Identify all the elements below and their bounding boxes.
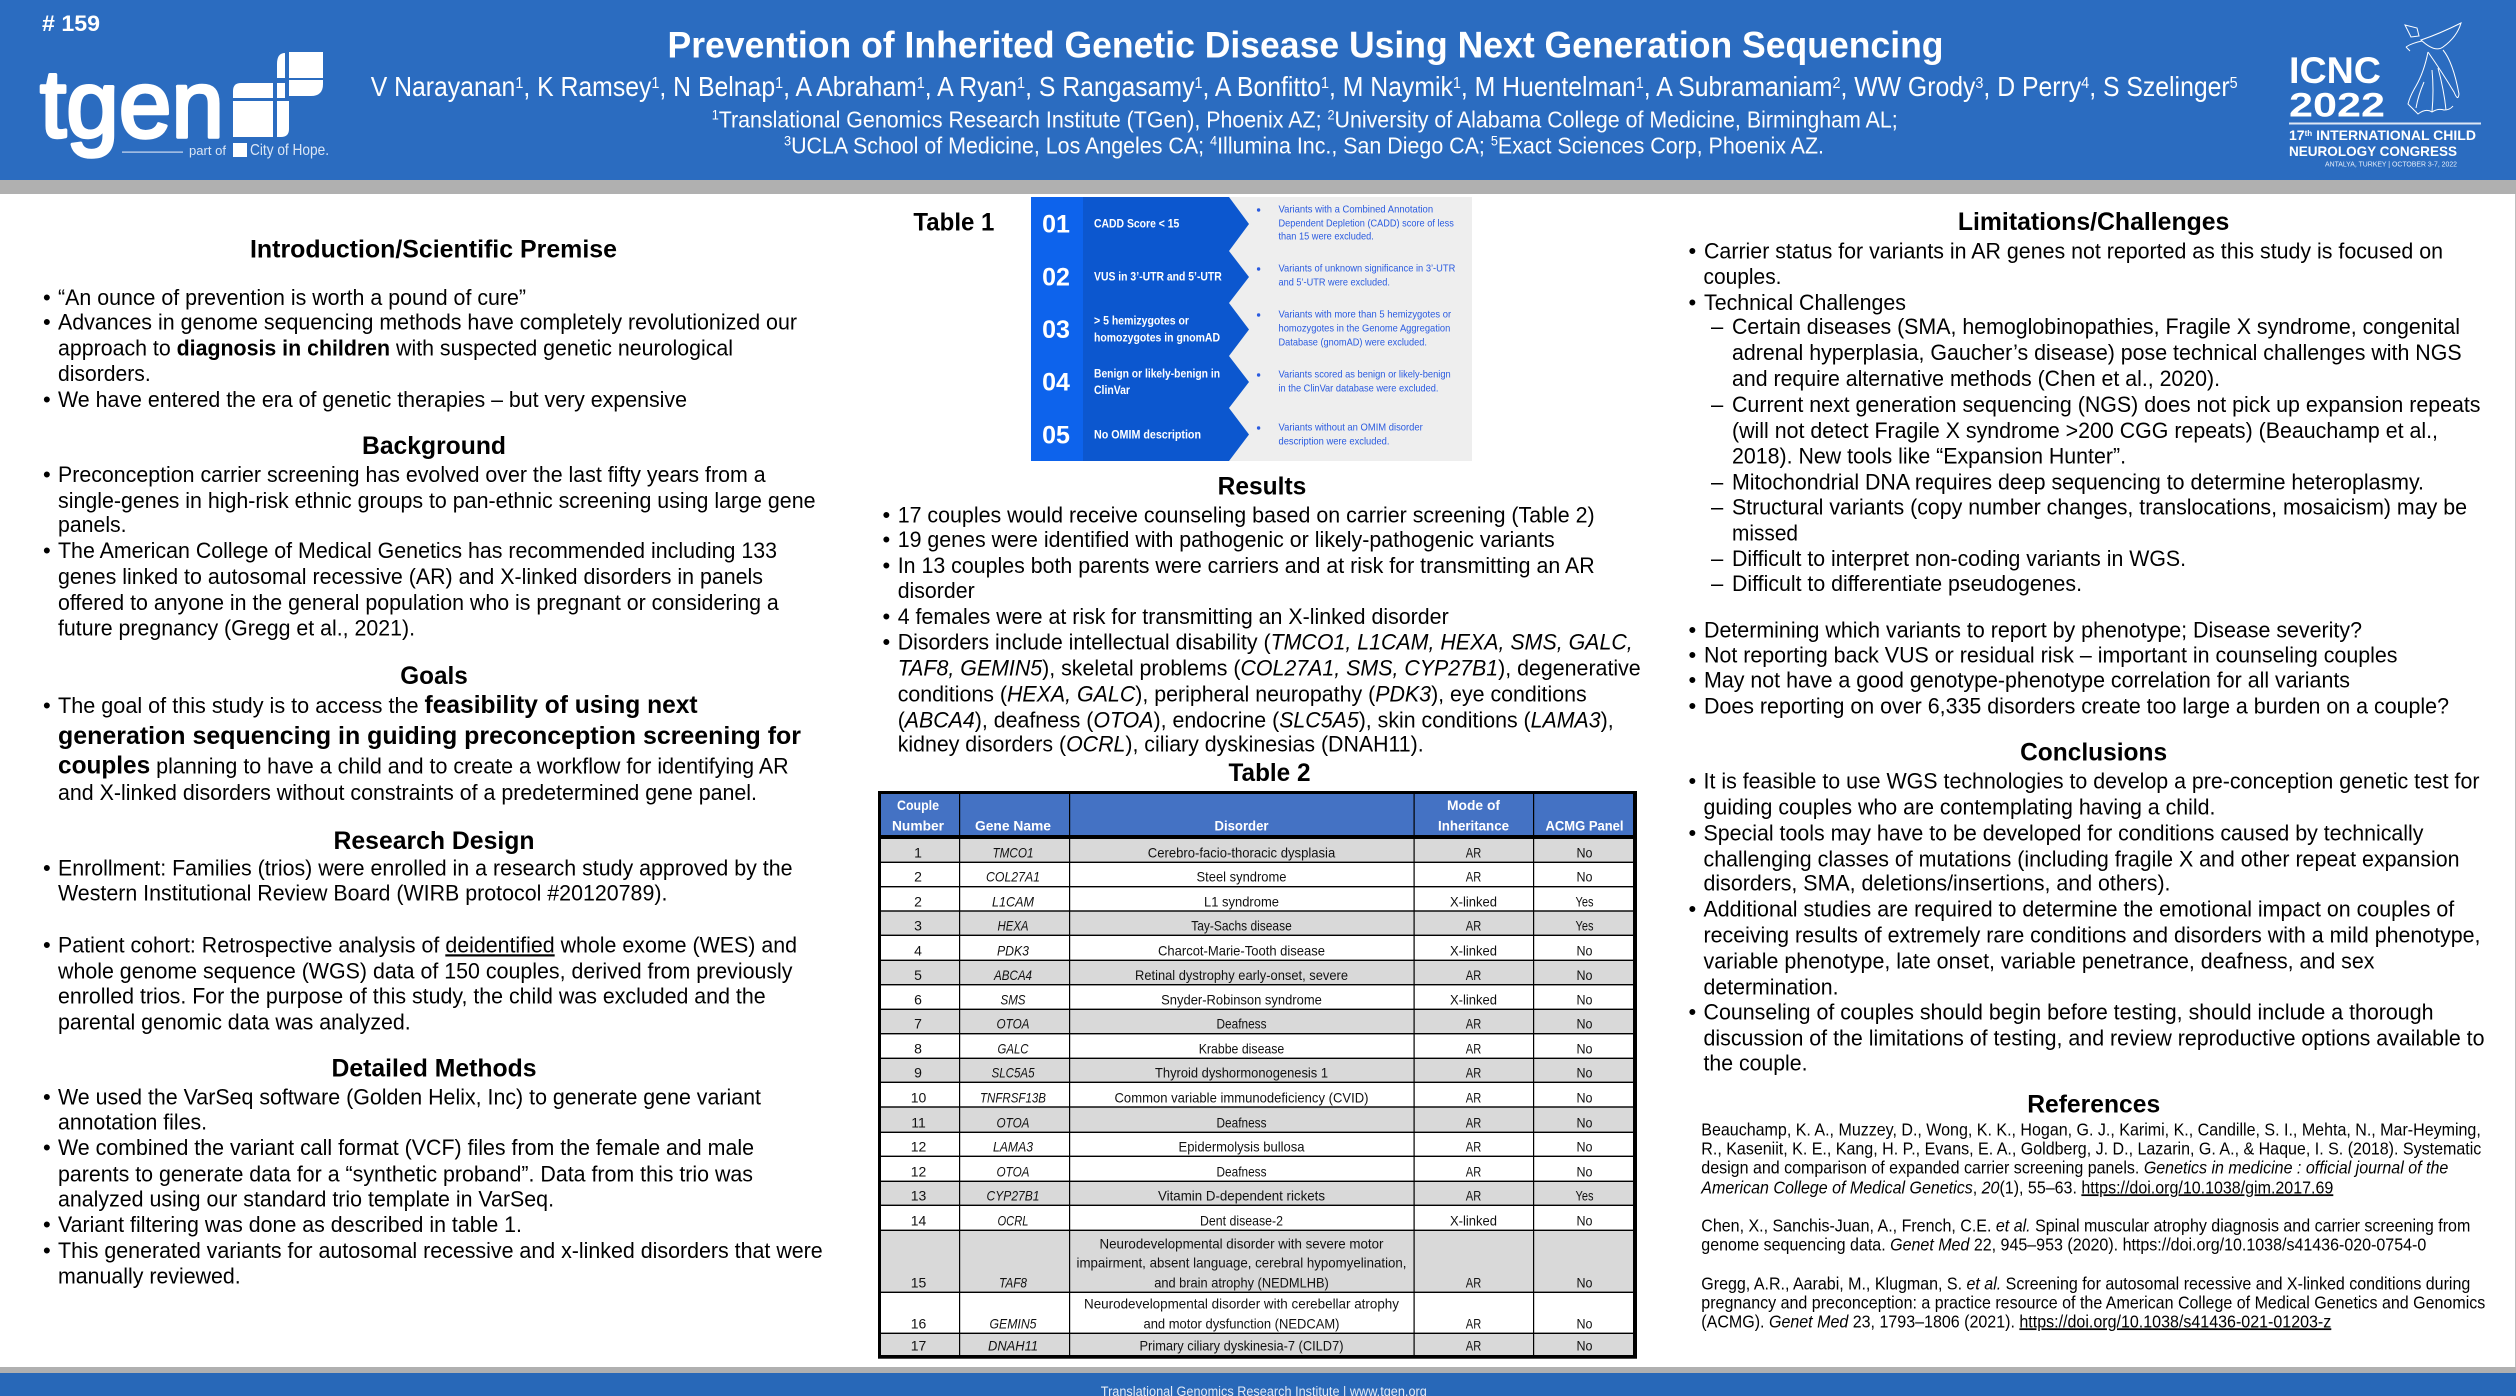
text: conclusions: variable phenotype, late onset, variable penetrance, deafness, and sex (1704, 949, 2374, 974)
table rows: COL27A1 (986, 869, 1040, 885)
table rows: No (1576, 845, 1593, 861)
table rows: Neurodevelopmental disorder with cerebellar atrophy (1084, 1296, 1399, 1312)
table rows: SLC5A5 (992, 1065, 1035, 1081)
affiliations: 3UCLA School of Medicine, Los Angeles CA; 4Illumina Inc., San Diego CA; 5Exact Sciences Corp, Phoenix AZ. (784, 133, 1824, 159)
text: references: Gregg, A.R., Aarabi, M., Klugman, S. et al. Screening for autosomal recessive and X-linked conditions during (1701, 1273, 2470, 1293)
step labels: VUS in 3’-UTR and 5’-UTR (1094, 271, 1222, 283)
table rows: AR (1466, 1065, 1481, 1081)
step labels: ClinVar (1094, 385, 1130, 397)
text: goals: • (43, 693, 51, 718)
text: conclusions: disorders, SMA, deletions/insertions, and others). (1704, 871, 2170, 896)
table rows: No (1576, 992, 1593, 1008)
table rows: Dent disease-2 (1200, 1213, 1283, 1229)
text: conclusions: the couple. (1704, 1051, 1808, 1076)
table rows: Snyder-Robinson syndrome (1161, 992, 1322, 1008)
table rows: 10 (911, 1090, 926, 1106)
table rows: AR (1466, 1041, 1481, 1057)
text: background: The American College of Medical Genetics has recommended including 133 (58, 538, 777, 563)
table rows: L1 syndrome (1204, 894, 1279, 910)
heading: introduction: Introduction/Scientific Premise (250, 236, 617, 264)
table rows: SMS (1000, 992, 1026, 1008)
table rows: OTOA (996, 1164, 1030, 1180)
text: results: • (882, 527, 890, 552)
table rows: OTOA (996, 1016, 1030, 1032)
text: conclusions: Special tools may have to be developed for conditions caused by technically (1704, 821, 2424, 846)
text: goals: and X-linked disorders without constraints of a predetermined gene panel. (58, 780, 757, 805)
table rows: Retinal dystrophy early-onset, severe (1135, 967, 1348, 983)
text: results: • (882, 502, 890, 527)
heading: background: Background (362, 432, 506, 460)
heading: conclusions: Conclusions (2020, 738, 2167, 766)
step descriptions: Variants without an OMIM disorder (1278, 422, 1423, 434)
text: introduction: • (43, 387, 51, 412)
table rows: No (1576, 1338, 1593, 1354)
table rows: X-linked (1450, 894, 1497, 910)
text: limitations: Certain diseases (SMA, hemoglobinopathies, Fragile X syndrome, congenital (1732, 314, 2460, 339)
text: background (43, 462, 816, 641)
text: detailed methods: This generated variants for autosomal recessive and x-linked disorders that were (58, 1238, 823, 1263)
text: results: kidney disorders (OCRL), ciliary dyskinesias (DNAH11). (898, 732, 1424, 757)
table rows: AR (1466, 1164, 1481, 1180)
text: limitations: Determining which variants to report by phenotype; Disease severity? (1704, 617, 2362, 642)
table rows: 12 (911, 1164, 926, 1180)
text: background: Preconception carrier screening has evolved over the last fifty years from a (58, 462, 766, 487)
text: research design: • (43, 856, 51, 881)
heading: detailed methods: Detailed Methods (332, 1055, 536, 1083)
text: results: TAF8, GEMIN5), skeletal problems (COL27A1, SMS, CYP27B1), degenerative (898, 656, 1641, 681)
text: introduction: disorders. (58, 361, 151, 386)
table rows: OCRL (998, 1213, 1028, 1229)
table rows: Tay-Sachs disease (1191, 918, 1292, 934)
text: conclusions: determination. (1704, 974, 1838, 999)
text: limitations: Not reporting back VUS or residual risk – important in counseling couples (1704, 643, 2398, 668)
text: references (1700, 1120, 2485, 1331)
table rows: No (1576, 869, 1593, 885)
logo: ICNC 2022: 2022 (2289, 87, 2385, 125)
text: results: • (882, 553, 890, 578)
text: goals: couples planning to have a child and to create a workflow for identifying AR (58, 752, 789, 780)
table rows: Yes (1576, 894, 1594, 910)
text: detailed methods: • (43, 1212, 51, 1237)
table rows: Steel syndrome (1196, 869, 1287, 885)
text: results: disorder (898, 578, 975, 603)
text: limitations: • (1688, 290, 1696, 315)
text: detailed methods: We combined the variant call format (VCF) files from the female and male (58, 1135, 754, 1160)
table rows: and motor dysfunction (NEDCAM) (1144, 1316, 1340, 1332)
text: limitations: (will not detect Fragile X syndrome >200 CGG repeats) (Beauchamp et al., (1732, 418, 2438, 443)
poster number: # 159 (42, 11, 100, 36)
table rows: 12 (911, 1139, 926, 1155)
table rows: 6 (914, 992, 922, 1008)
table rows: TMCO1 (992, 845, 1034, 861)
text: limitations: Difficult to interpret non-coding variants in WGS. (1732, 546, 2186, 571)
text: introduction: “An ounce of prevention is worth a pound of cure” (58, 285, 526, 310)
text: introduction: • (43, 285, 51, 310)
heading: research design: Research Design (334, 827, 534, 855)
text: research design: Enrollment: Families (trios) were enrolled in a research study approved by the (58, 856, 792, 881)
table rows: No (1576, 1065, 1593, 1081)
table rows: Thyroid dyshormonogenesis 1 (1155, 1065, 1328, 1081)
text: limitations: 2018). New tools like “Expansion Hunter”. (1732, 443, 2126, 468)
text: research design: whole genome sequence (WGS) data of 150 couples, derived from previously (57, 958, 793, 983)
table rows: AR (1466, 967, 1481, 983)
step numbers (1042, 210, 1070, 449)
table rows: 9 (914, 1065, 922, 1081)
table rows: impairment, absent language, cerebral hypomyelination, (1076, 1255, 1406, 1271)
text: detailed methods: • (43, 1238, 51, 1263)
table rows: No (1576, 1041, 1593, 1057)
text: introduction (43, 285, 797, 412)
text: results: • (882, 630, 890, 655)
table rows: 1 (914, 845, 922, 861)
step descriptions: Variants scored as benign or likely-benign (1278, 369, 1451, 381)
text: conclusions (1688, 769, 2484, 1076)
text: background: • (43, 538, 51, 563)
table rows: AR (1466, 1115, 1481, 1131)
text: background: single-genes in high-risk ethnic groups to pan-ethnic screening using large gene (58, 488, 816, 513)
table rows: No (1576, 1275, 1593, 1291)
text: limitations: • (1688, 643, 1696, 668)
table rows: AR (1466, 1316, 1481, 1332)
step descriptions: Variants with more than 5 hemizygotes or (1278, 309, 1452, 321)
table rows: AR (1466, 918, 1481, 934)
step descriptions: Variants with a Combined Annotation (1278, 204, 1433, 216)
text: limitations: • (1688, 238, 1696, 263)
step numbers: 04 (1042, 368, 1070, 396)
text: references: Chen, X., Sanchis-Juan, A., French, C.E. et al. Spinal muscular atrophy diagnosis and carrier screening from (1701, 1216, 2470, 1236)
step labels: CADD Score < 15 (1094, 218, 1180, 230)
step descriptions: in the ClinVar database were excluded. (1278, 383, 1438, 395)
text: results: (ABCA4), deafness (OTOA), endocrine (SLC5A5), skin conditions (LAMA3), (898, 707, 1614, 732)
text: limitations: adrenal hyperplasia, Gaucher’s disease) pose technical challenges with NGS (1732, 340, 2462, 365)
step numbers: 01 (1042, 210, 1070, 238)
text: goals (43, 691, 801, 805)
text: detailed methods: analyzed using our standard trio template in VarSeq. (58, 1187, 554, 1212)
text: limitations: – (1711, 314, 1724, 339)
table rows (911, 845, 1594, 1354)
table rows: AR (1466, 1139, 1481, 1155)
table rows: Deafness (1216, 1164, 1266, 1180)
text: results: Disorders include intellectual disability (TMCO1, L1CAM, HEXA, SMS, GALC, (898, 630, 1633, 655)
table rows: No (1576, 967, 1593, 983)
logo: tgen: City of Hope. (250, 142, 329, 159)
table rows: X-linked (1450, 992, 1497, 1008)
text: results: 17 couples would receive counseling based on carrier screening (Table 2) (898, 502, 1595, 527)
table rows: No (1576, 1213, 1593, 1229)
text: limitations: • (1688, 668, 1696, 693)
table rows: 5 (914, 967, 922, 983)
table rows: No (1576, 1164, 1593, 1180)
center column (878, 197, 1641, 1359)
text: limitations: Technical Challenges (1704, 290, 1906, 315)
table rows: 14 (911, 1213, 926, 1229)
text: conclusions: discussion of the limitations of testing, and review reproductive options available to (1704, 1026, 2484, 1051)
table header: Couple (897, 798, 939, 813)
table rows: No (1576, 1016, 1593, 1032)
text: conclusions: Additional studies are required to determine the emotional impact on couples of (1704, 897, 2455, 922)
text: limitations: missed (1732, 520, 1798, 545)
table rows: Deafness (1216, 1016, 1266, 1032)
text: references: (ACMG). Genet Med 23, 1793–1806 (2021). https://doi.org/10.1038/s41436-021-01203-z (1701, 1311, 2331, 1331)
text: goals: The goal of this study is to access the feasibility of using next (58, 691, 698, 719)
text: references: design and comparison of expanded carrier screening panels. Genetics in medicine : official journal of the (1701, 1158, 2448, 1178)
text: limitations: Structural variants (copy number changes, translocations, mosaicism) may be (1732, 494, 2467, 519)
table rows: 4 (914, 943, 922, 959)
text: introduction: We have entered the era of genetic therapies – but very expensive (58, 387, 687, 412)
text: limitations: Carrier status for variants in AR genes not reported as this study is focused on (1704, 238, 2443, 263)
header band (0, 0, 2516, 194)
logo: tgen: part of (189, 143, 226, 158)
text: limitations: Mitochondrial DNA requires deep sequencing to determine heteroplasmy. (1732, 469, 2424, 494)
text: limitations (1688, 238, 2480, 719)
icon: whirling dancer (2405, 23, 2461, 114)
table header (892, 798, 1624, 834)
authors: V Narayanan1, K Ramsey1, N Belnap1, A Abraham1, A Ryan1, S Rangasamy1, A Bonfitto1, M Naymik1, M Huentelman1, A Subramaniam2, WW Grody3, D Perry4, S Szelinger5 (371, 71, 2238, 102)
table rows: AR (1466, 869, 1481, 885)
table header: Disorder (1214, 819, 1269, 834)
affiliations: 1Translational Genomics Research Institute (TGen), Phoenix AZ; 2University of Alabama College of Medicine, Birmingham AL; (712, 107, 1898, 133)
text: limitations: and require alternative methods (Chen et al., 2020). (1732, 366, 2220, 391)
text: conclusions: challenging classes of mutations (including fragile X and other repeat expansion (1704, 847, 2460, 872)
step labels: homozygotes in gnomAD (1094, 332, 1220, 344)
table rows: No (1576, 1139, 1593, 1155)
step descriptions: Variants of unknown significance in 3’-UTR (1278, 263, 1456, 275)
text: limitations: • (1688, 694, 1696, 719)
text: introduction: Advances in genome sequencing methods have completely revolutionized our (58, 309, 797, 334)
text: conclusions: receiving results of extremely rare conditions and disorders with a mild phenotype, (1704, 923, 2480, 948)
table rows: DNAH11 (988, 1338, 1038, 1354)
text: conclusions: • (1688, 897, 1696, 922)
table header: Gene Name (975, 819, 1051, 834)
text: detailed methods: • (43, 1084, 51, 1109)
step numbers: 02 (1042, 263, 1070, 291)
text: background: panels. (58, 512, 127, 537)
text: limitations: couples. (1704, 264, 1782, 289)
text: limitations: – (1711, 546, 1724, 571)
table rows: PDK3 (997, 943, 1029, 959)
text: background: future pregnancy (Gregg et al., 2021). (58, 616, 415, 641)
table rows: AR (1466, 1016, 1481, 1032)
table rows: 17 (911, 1338, 926, 1354)
table rows: 15 (911, 1275, 926, 1291)
table rows: AR (1466, 1090, 1481, 1106)
text: detailed methods: manually reviewed. (58, 1264, 241, 1289)
text: limitations: Difficult to differentiate pseudogenes. (1732, 571, 2082, 596)
table header: ACMG Panel (1546, 819, 1624, 834)
text: introduction: approach to diagnosis in children with suspected genetic neurological (58, 335, 733, 360)
text: detailed methods: Variant filtering was done as described in table 1. (58, 1212, 522, 1237)
logo: ICNC 2022: NEUROLOGY CONGRESS (2289, 143, 2457, 159)
table rows: 16 (911, 1316, 926, 1332)
table rows: ABCA4 (993, 967, 1032, 983)
table rows: AR (1466, 1338, 1481, 1354)
text: limitations: Does reporting on over 6,335 disorders create too large a burden on a couple? (1704, 694, 2449, 719)
table rows: Krabbe disease (1199, 1041, 1284, 1057)
text: conclusions: • (1688, 769, 1696, 794)
text: results: In 13 couples both parents were carriers and at risk for transmitting an AR (898, 553, 1595, 578)
table rows: AR (1466, 1188, 1481, 1204)
table rows: 8 (914, 1041, 922, 1057)
text: research design: • (43, 932, 51, 957)
table rows: X-linked (1450, 1213, 1497, 1229)
step labels: > 5 hemizygotes or (1094, 315, 1189, 327)
panel: table 1 filter steps (1031, 197, 1472, 461)
table rows: No (1576, 1090, 1593, 1106)
text: background: genes linked to autosomal recessive (AR) and X-linked disorders in panels (58, 564, 763, 589)
text: background: offered to anyone in the general population who is pregnant or considering a (58, 590, 780, 615)
table rows: No (1576, 943, 1593, 959)
step numbers: 03 (1042, 316, 1070, 344)
text: research design: parental genomic data was analyzed. (58, 1009, 411, 1034)
table rows: 2 (914, 869, 922, 885)
table header: Inheritance (1438, 819, 1509, 834)
text: limitations: – (1711, 469, 1724, 494)
heading: table 1: Table 1 (913, 209, 994, 237)
table rows: 3 (914, 918, 922, 934)
step descriptions: homozygotes in the Genome Aggregation (1278, 323, 1450, 335)
left column (43, 236, 823, 1289)
table rows: 7 (914, 1016, 922, 1032)
text: results (882, 502, 1641, 757)
text: limitations: Current next generation sequencing (NGS) does not pick up expansion repeats (1732, 392, 2480, 417)
text: research design: Patient cohort: Retrospective analysis of deidentified whole exome (WES) and (58, 932, 797, 957)
heading: references: References (2027, 1090, 2160, 1118)
heading: results: Results (1218, 472, 1306, 500)
table rows: Common variable immunodeficiency (CVID) (1114, 1090, 1368, 1106)
table rows: CYP27B1 (986, 1188, 1040, 1204)
table rows: GEMIN5 (990, 1316, 1037, 1332)
text: results: • (882, 604, 890, 629)
text: references: genome sequencing data. Genet Med 22, 945–953 (2020). https://doi.org/10.1038/s41436-020-0754-0 (1701, 1235, 2426, 1255)
table rows: X-linked (1450, 943, 1497, 959)
text: references: American College of Medical Genetics, 20(1), 55–63. https://doi.org/10.1038/gim.2017.69 (1700, 1177, 2333, 1197)
step numbers: 05 (1042, 421, 1070, 449)
table header: Number (892, 819, 945, 834)
text: conclusions: It is feasible to use WGS technologies to develop a pre-conception genetic test for (1704, 769, 2480, 794)
heading: limitations: Limitations/Challenges (1958, 208, 2229, 236)
heading: goals: Goals (400, 662, 468, 690)
table rows: Primary ciliary dyskinesia-7 (CILD7) (1140, 1338, 1344, 1354)
step descriptions: Database (gnomAD) were excluded. (1278, 337, 1427, 349)
text: goals: generation sequencing in guiding preconception screening for (58, 722, 801, 750)
affiliations (712, 107, 1898, 159)
step labels: Benign or likely-benign in (1094, 368, 1220, 380)
table rows: Epidermolysis bullosa (1178, 1139, 1305, 1155)
table rows: GALC (998, 1041, 1029, 1057)
text: research design: Western Institutional Review Board (WIRB protocol #20120789). (58, 880, 667, 905)
table rows: Cerebro-facio-thoracic dysplasia (1148, 845, 1335, 861)
table rows: and brain atrophy (NEDMLHB) (1154, 1275, 1329, 1291)
text: detailed methods (43, 1084, 823, 1289)
text: introduction: • (43, 309, 51, 334)
logo: ICNC 2022: ANTALYA, TURKEY | OCTOBER 3-7, 2022 (2325, 160, 2457, 169)
table rows: LAMA3 (993, 1139, 1033, 1155)
logo: ICNC 2022 (2289, 23, 2481, 169)
table rows: Vitamin D-dependent rickets (1158, 1188, 1325, 1204)
table rows: OTOA (996, 1115, 1030, 1131)
table rows: Charcot-Marie-Tooth disease (1158, 943, 1325, 959)
footer band (0, 1367, 2516, 1396)
text: detailed methods: We used the VarSeq software (Golden Helix, Inc) to generate gene variant (58, 1084, 761, 1109)
table rows: Neurodevelopmental disorder with severe motor (1100, 1236, 1384, 1252)
table header: Mode of (1447, 798, 1501, 813)
table rows: HEXA (998, 918, 1028, 934)
step labels: No OMIM description (1094, 430, 1201, 442)
text: limitations: – (1711, 571, 1724, 596)
table rows: Deafness (1216, 1115, 1266, 1131)
text: conclusions: guiding couples who are contemplating having a child. (1704, 795, 2216, 820)
logo: ICNC 2022: ICNC (2289, 50, 2381, 91)
text: conclusions: • (1688, 1000, 1696, 1025)
table rows: TNFRSF13B (980, 1090, 1046, 1106)
text: background: • (43, 462, 51, 487)
text: limitations: – (1711, 494, 1724, 519)
heading: table 2: Table 2 (1228, 759, 1310, 787)
table rows: No (1576, 1115, 1593, 1131)
text: limitations: – (1711, 392, 1724, 417)
right column (1688, 208, 2485, 1331)
text: detailed methods: annotation files. (58, 1109, 207, 1134)
table rows: Yes (1576, 918, 1594, 934)
logo: tgen: tgen (40, 51, 224, 158)
table rows: 2 (914, 894, 922, 910)
text: results: 19 genes were identified with pathogenic or likely-pathogenic variants (898, 527, 1555, 552)
table rows: AR (1466, 1275, 1481, 1291)
step descriptions: than 15 were excluded. (1278, 231, 1374, 243)
step descriptions: and 5’-UTR were excluded. (1278, 277, 1390, 289)
table rows: TAF8 (999, 1275, 1027, 1291)
text: detailed methods: parents to generate data for a “synthetic proband”. Data from this trio was (58, 1161, 753, 1186)
table 2 (878, 791, 1637, 1359)
step descriptions: Dependent Depletion (CADD) score of less (1278, 218, 1454, 230)
table rows: 11 (911, 1115, 926, 1131)
title: Prevention of Inherited Genetic Disease Using Next Generation Sequencing (668, 23, 1944, 65)
table rows: No (1576, 1316, 1593, 1332)
logo: ICNC 2022: 17th INTERNATIONAL CHILD (2289, 127, 2476, 143)
text: results: 4 females were at risk for transmitting an X-linked disorder (898, 604, 1449, 629)
text: detailed methods: • (43, 1135, 51, 1160)
text: conclusions: Counseling of couples should begin before testing, should include a thorough (1704, 1000, 2434, 1025)
text: conclusions: • (1688, 821, 1696, 846)
table rows: Yes (1576, 1188, 1594, 1204)
text: research design (43, 856, 797, 1034)
text: limitations: May not have a good genotype-phenotype correlation for all variants (1704, 668, 2350, 693)
step labels (1094, 218, 1222, 442)
table rows: 13 (911, 1188, 926, 1204)
text: limitations: • (1688, 617, 1696, 642)
step descriptions (1257, 204, 1456, 448)
table rows: L1CAM (992, 894, 1034, 910)
text: research design: enrolled trios. For the purpose of this study, the child was excluded and the (58, 983, 766, 1008)
step descriptions: description were excluded. (1278, 436, 1390, 448)
table rows: AR (1466, 845, 1481, 861)
logo: tgen (40, 51, 329, 159)
text: results: conditions (HEXA, GALC), peripheral neuropathy (PDK3), eye conditions (898, 682, 1587, 707)
